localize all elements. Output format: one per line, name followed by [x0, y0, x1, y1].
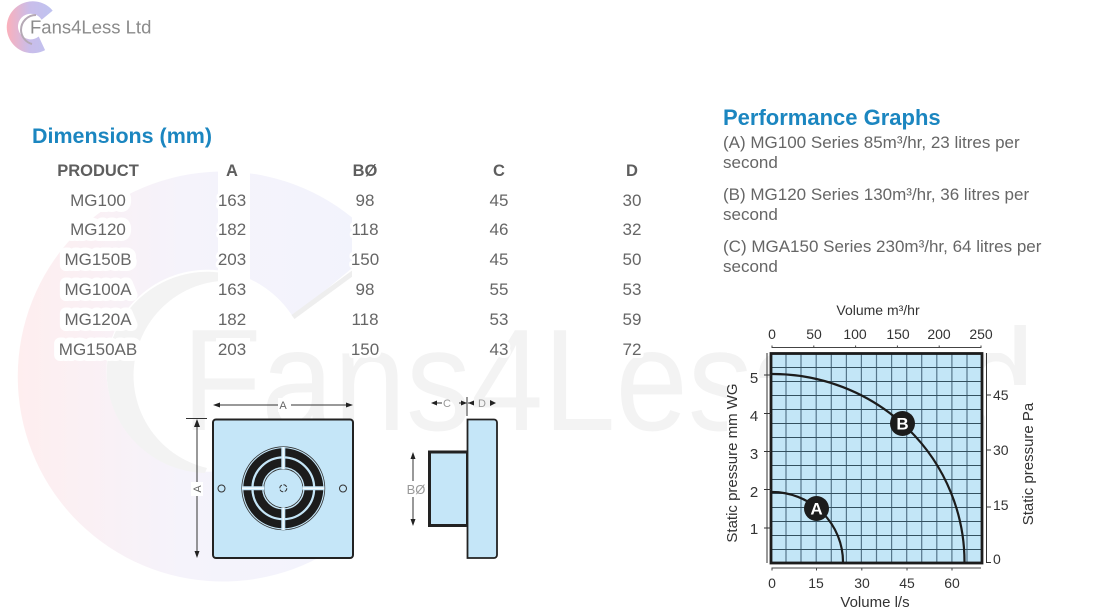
- bottom axis: 60: [944, 575, 960, 591]
- dimension arrows C and D: D: [478, 398, 486, 410]
- badge B: [890, 411, 915, 436]
- row MG150AB: 203: [218, 340, 246, 359]
- top axis: 150: [886, 326, 910, 342]
- row MG100A: 98: [356, 280, 374, 299]
- row MG150B: 150: [351, 250, 379, 269]
- row MG120: 118: [351, 220, 379, 239]
- badge B: B: [896, 414, 909, 434]
- bottom axis: Volume l/s: [840, 594, 910, 611]
- row MG150AB: 43: [490, 340, 508, 359]
- diagram: fan side view: [430, 420, 497, 558]
- top axis: 0: [768, 326, 776, 342]
- series A: second: [723, 153, 778, 172]
- row MG120A: 182: [218, 310, 246, 329]
- row MG100A: 55: [490, 280, 508, 299]
- diagram: fan front view: [213, 420, 353, 558]
- row MG100: MG100: [70, 191, 126, 210]
- row MG150B: 45: [490, 250, 508, 269]
- row MG150AB: MG150AB: [59, 340, 137, 359]
- performance text block: [723, 133, 1042, 276]
- screw holes: [218, 485, 346, 492]
- row MG120: 46: [490, 220, 508, 239]
- row MG120A: 118: [351, 310, 379, 329]
- watermark: large logo: [18, 160, 1045, 582]
- right axis: 30: [993, 442, 1009, 458]
- plot area with grid: [771, 353, 982, 563]
- badge A: [804, 496, 829, 521]
- row MG100: 45: [490, 191, 508, 210]
- dimension arrow A: A: [279, 400, 287, 412]
- right axis: 45: [993, 387, 1009, 403]
- row MG120: 182: [218, 220, 246, 239]
- row MG100: [70, 191, 641, 210]
- left axis: 4: [750, 408, 758, 425]
- row MG120: MG120: [70, 220, 126, 239]
- left axis: Static pressure mm WG: [724, 383, 741, 543]
- row MG100: 30: [623, 191, 641, 210]
- dimension arrow A: [213, 398, 353, 412]
- logo: [7, 1, 151, 53]
- heading: performance graphs: Performance Graphs: [723, 105, 941, 130]
- row MG150B: 203: [218, 250, 246, 269]
- dimension arrow A vertical: [186, 418, 207, 558]
- table header: BØ: [353, 162, 378, 180]
- dimension arrow A vertical: A: [192, 485, 204, 493]
- top axis: 50: [806, 326, 822, 342]
- series A: (A) MG100 Series 85m³/hr, 23 litres per: [723, 133, 1020, 152]
- row MG120: [70, 220, 641, 239]
- top axis: [768, 302, 993, 348]
- series C: second: [723, 257, 778, 276]
- bottom axis: 0: [768, 575, 776, 591]
- row MG120A: 59: [623, 310, 641, 329]
- table header: C: [493, 162, 505, 180]
- left axis: 2: [750, 484, 758, 501]
- table header: [57, 162, 638, 180]
- series A: [723, 133, 1020, 172]
- dimension arrows C and D: [431, 397, 496, 416]
- bottom axis: 45: [899, 575, 915, 591]
- right axis: 0: [993, 551, 1001, 567]
- row MG120A: MG120A: [64, 310, 132, 329]
- bottom axis: [768, 568, 981, 611]
- row MG100: 163: [218, 191, 246, 210]
- row MG150B: 50: [623, 250, 641, 269]
- dimension arrow B diameter: [404, 452, 428, 526]
- fan grille: [242, 447, 325, 530]
- bottom axis: 15: [808, 575, 824, 591]
- row MG100: 98: [356, 191, 374, 210]
- left axis: 1: [750, 521, 758, 538]
- table header: D: [626, 162, 638, 180]
- table header: A: [226, 162, 238, 180]
- row MG100A: 53: [623, 280, 641, 299]
- dimension arrow B diameter: BØ: [407, 482, 425, 497]
- row MG150AB: 72: [623, 340, 641, 359]
- top axis: 200: [927, 326, 951, 342]
- series B: (B) MG120 Series 130m³/hr, 36 litres per: [723, 185, 1029, 204]
- table header: PRODUCT: [57, 162, 139, 180]
- row MG150B: MG150B: [64, 250, 132, 269]
- top axis: 250: [969, 326, 993, 342]
- left axis: 5: [750, 370, 758, 387]
- top axis: Volume m³/hr: [836, 302, 920, 318]
- row MG120A: [64, 310, 641, 329]
- right axis: 15: [993, 497, 1009, 513]
- row MG100A: 163: [218, 280, 246, 299]
- series C: [723, 237, 1042, 276]
- series B: [723, 185, 1029, 224]
- bottom axis: 30: [854, 575, 870, 591]
- row MG150AB: [59, 340, 641, 359]
- watermark: large logo: Fans4Less Ltd: [182, 299, 1035, 462]
- row MG100A: MG100A: [64, 280, 132, 299]
- dimensions table: [57, 162, 641, 359]
- logo: Fans4Less Ltd: [30, 16, 151, 38]
- right axis: [986, 353, 1037, 567]
- curve B: [772, 374, 965, 562]
- right axis: Static pressure Pa: [1020, 402, 1037, 525]
- row MG150AB: 150: [351, 340, 379, 359]
- performance chart: [724, 302, 1037, 611]
- left axis: 3: [750, 446, 758, 463]
- badge A: A: [810, 500, 823, 518]
- row MG100A: [64, 280, 641, 299]
- curve A: [772, 492, 843, 562]
- series B: second: [723, 205, 778, 224]
- row MG120A: 53: [490, 310, 508, 329]
- top axis: 100: [843, 326, 867, 342]
- heading: dimensions: Dimensions (mm): [32, 124, 212, 148]
- series C: (C) MGA150 Series 230m³/hr, 64 litres per: [723, 237, 1042, 256]
- row MG120: 32: [623, 220, 641, 239]
- dimension arrows C and D: C: [443, 398, 451, 410]
- left axis: [724, 353, 771, 563]
- row MG150B: [64, 250, 641, 269]
